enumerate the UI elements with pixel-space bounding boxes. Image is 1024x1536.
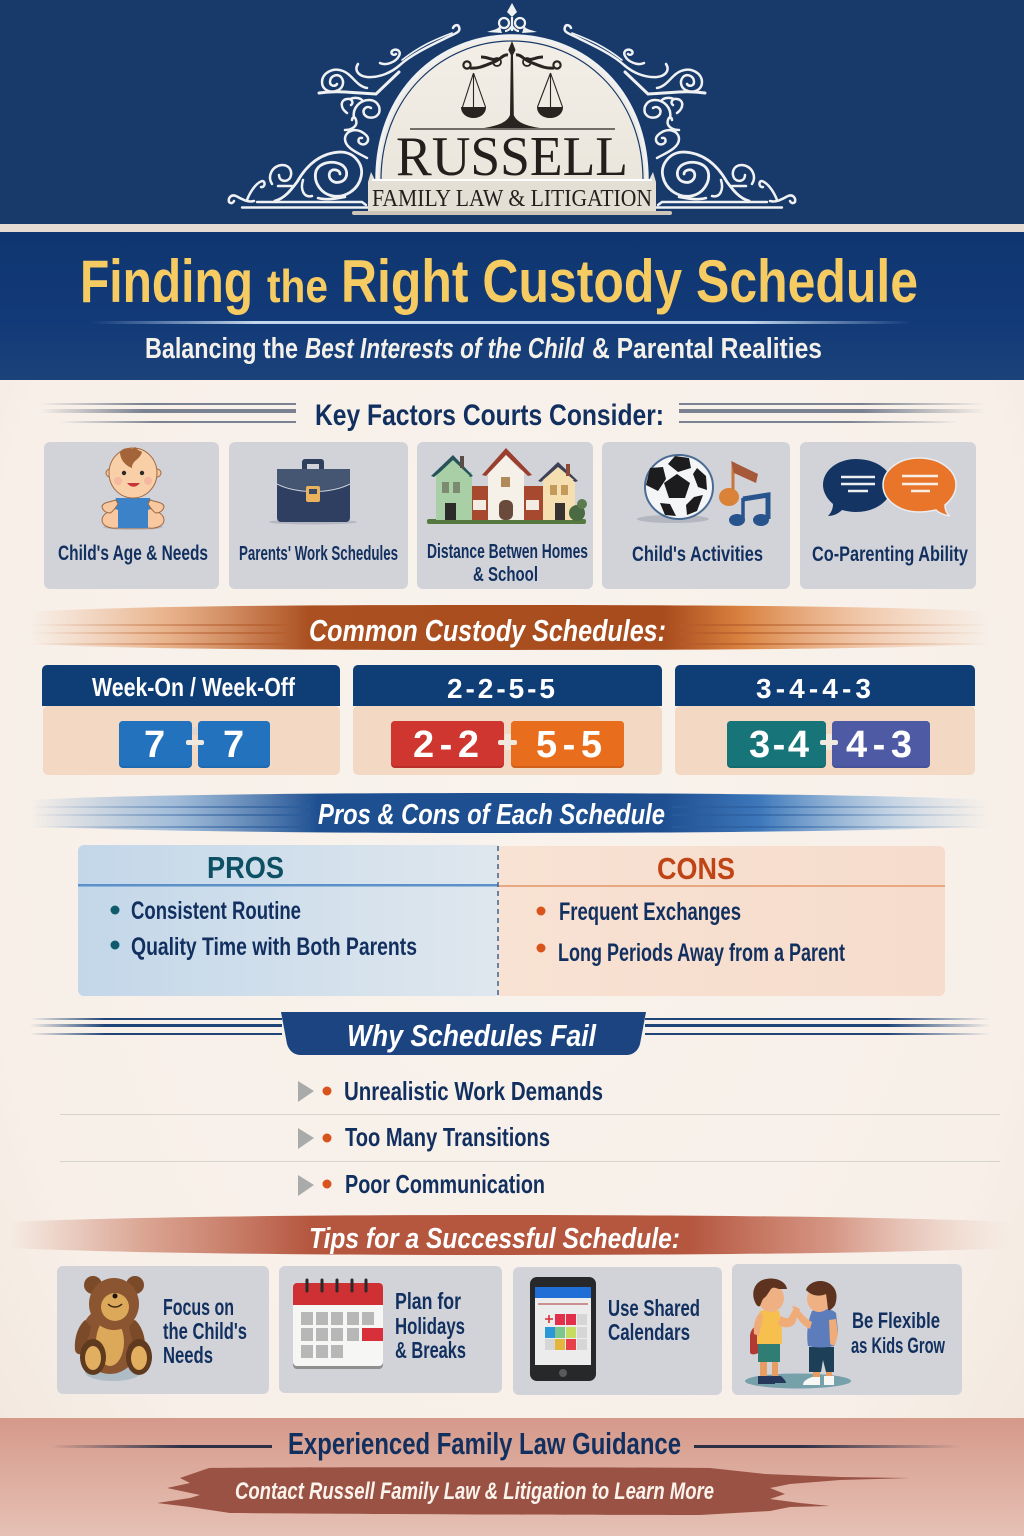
icon: briefcase: [269, 459, 357, 524]
heading: key factors: Key Factors Courts Consider:: [315, 399, 664, 432]
pills: 3-4 and 4-3: [727, 721, 930, 768]
card: plan for holidays and breaks: Holidays: [395, 1313, 465, 1339]
item: poor communication: [298, 1169, 545, 1199]
card: parents' work schedules: Parents' Work Schedules: [239, 543, 398, 565]
logo: banner: FAMILY LAW & LITIGATION: [372, 186, 652, 212]
logo: firm name: RUSSELL: [396, 126, 628, 188]
heading: why schedules fail: [30, 1012, 990, 1055]
card: distance between homes and school: & School: [473, 564, 538, 586]
title band: [0, 232, 1024, 380]
pills: 2-2 and 5-5: [391, 721, 624, 768]
subtitle: Balancing the: [145, 333, 298, 365]
footer: [0, 1418, 1024, 1536]
heading: why schedules fail: Why Schedules Fail: [347, 1018, 597, 1053]
right child: [809, 1347, 834, 1372]
logo: scales of justice: [410, 41, 615, 129]
panel: tips cards: [57, 1264, 962, 1395]
heading: common custody schedules: Common Custody Schedules:: [309, 613, 666, 648]
icon: teddy bear: [75, 1276, 152, 1381]
card: use shared calendars: [513, 1267, 722, 1395]
call to action brush stroke: Contact Russell Family Law & Litigation to Learn More: [235, 1478, 714, 1505]
icon: calendar: [293, 1280, 383, 1369]
panel: pros: Quality Time with Both Parents: [131, 933, 417, 961]
item: poor communication: Poor Communication: [345, 1169, 545, 1199]
list: reasons schedules fail: [60, 1076, 1000, 1199]
logo: banner: [352, 172, 672, 215]
card: be flexible as kids grow: [732, 1264, 962, 1395]
subtitle: Best Interests of the Child: [305, 333, 585, 365]
panel: cons: Long Periods Away from a Parent: [558, 939, 845, 967]
card: use shared calendars: Calendars: [608, 1319, 690, 1345]
panel: schedule 3-4-4-3: 3-4-4-3: [756, 673, 871, 704]
icon: speech bubbles: [823, 458, 956, 516]
panel: cons: CONS: [657, 851, 735, 886]
main title: Finding: [80, 248, 253, 315]
card: use shared calendars: Use Shared: [608, 1295, 700, 1321]
heading: tips: [10, 1215, 1010, 1255]
panel: schedule 2-2-5-5: 2-2-5-5: [447, 673, 555, 704]
pills: 7 and 7: [119, 721, 270, 768]
card: child's activities: Child's Activities: [632, 543, 763, 566]
heading: pros and cons: [30, 793, 990, 833]
panel: schedule week-on week-off: [42, 665, 340, 775]
icon: two kids: [745, 1279, 851, 1388]
item: unrealistic work demands: Unrealistic Work Demands: [344, 1076, 603, 1106]
card: be flexible as kids grow: as Kids Grow: [851, 1333, 946, 1358]
panel: pros: Consistent Routine: [131, 897, 301, 925]
header band with logo: [0, 0, 1024, 232]
pills: 2-2 and 5-5: 2-2: [413, 724, 479, 766]
icon: soccer ball and music notes: [637, 455, 769, 526]
subtitle: [145, 333, 822, 365]
card: plan for holidays and breaks: & Breaks: [395, 1337, 466, 1363]
item: too many transitions: [298, 1122, 550, 1152]
card: plan for holidays and breaks: [279, 1266, 502, 1393]
pills: 3-4 and 4-3: 4-3: [846, 724, 912, 766]
card: child's age and needs: Child's Age & Needs: [58, 542, 208, 565]
main title: the: [267, 260, 328, 312]
card: focus on the child's needs: [57, 1266, 269, 1394]
card: plan for holidays and breaks: Plan for: [395, 1288, 461, 1314]
item: too many transitions: Too Many Transitions: [345, 1122, 550, 1152]
pills: 2-2 and 5-5: 5-5: [536, 724, 602, 766]
card: co-parenting ability: Co-Parenting Ability: [812, 543, 968, 566]
icon: baby: [102, 447, 164, 530]
card: distance between homes and school: [417, 442, 593, 589]
subtitle: & Parental Realities: [592, 333, 822, 365]
card: focus on the child's needs: Focus on: [163, 1294, 234, 1320]
main title: [80, 248, 918, 315]
logo: dome: [377, 36, 647, 212]
card: child's age and needs: [44, 442, 219, 589]
panel: key factors cards: [44, 442, 976, 589]
logo: crown finial: [487, 3, 537, 33]
card: focus on the child's needs: Needs: [163, 1342, 213, 1368]
card: be flexible as kids grow: Be Flexible: [852, 1308, 940, 1333]
panel: pros: PROS: [207, 850, 284, 885]
panel: cons: Frequent Exchanges: [559, 898, 741, 926]
pills: 7 and 7: 7: [144, 724, 165, 766]
call to action brush stroke: [157, 1467, 910, 1515]
panel: schedule week-on week-off: Week-On / Week-Off: [92, 672, 295, 702]
logo: ornamental scrollwork right: [565, 25, 795, 207]
panel: schedule 2-2-5-5: [353, 665, 662, 775]
heading: tips: Tips for a Successful Schedule:: [309, 1223, 680, 1255]
logo: ornamental scrollwork left: [229, 25, 459, 207]
panel: pros: [78, 845, 498, 996]
main title: Right Custody Schedule: [341, 248, 918, 315]
icon: phone with calendar: [530, 1277, 596, 1381]
item: unrealistic work demands: [298, 1076, 603, 1106]
heading: pros and cons: Pros & Cons of Each Schedule: [318, 799, 665, 831]
footer: Experienced Family Law Guidance: [288, 1426, 681, 1461]
heading: common custody schedules: [30, 605, 990, 650]
heading: key factors: [40, 399, 985, 432]
panel: schedule 3-4-4-3: [675, 665, 975, 775]
pills: 3-4 and 4-3: 3-4: [749, 724, 809, 766]
panel: pros and cons: [78, 845, 945, 996]
card: co-parenting ability: [800, 442, 976, 589]
card: focus on the child's needs: the Child's: [163, 1318, 247, 1344]
icon: houses: [427, 448, 587, 524]
card: parents' work schedules: [229, 442, 408, 589]
left child: [750, 1326, 758, 1354]
card: distance between homes and school: Distance Betwen Homes: [427, 541, 588, 563]
card: child's activities: [602, 442, 790, 589]
pills: 7 and 7: 7: [223, 724, 244, 766]
panel: cons: [498, 846, 945, 996]
